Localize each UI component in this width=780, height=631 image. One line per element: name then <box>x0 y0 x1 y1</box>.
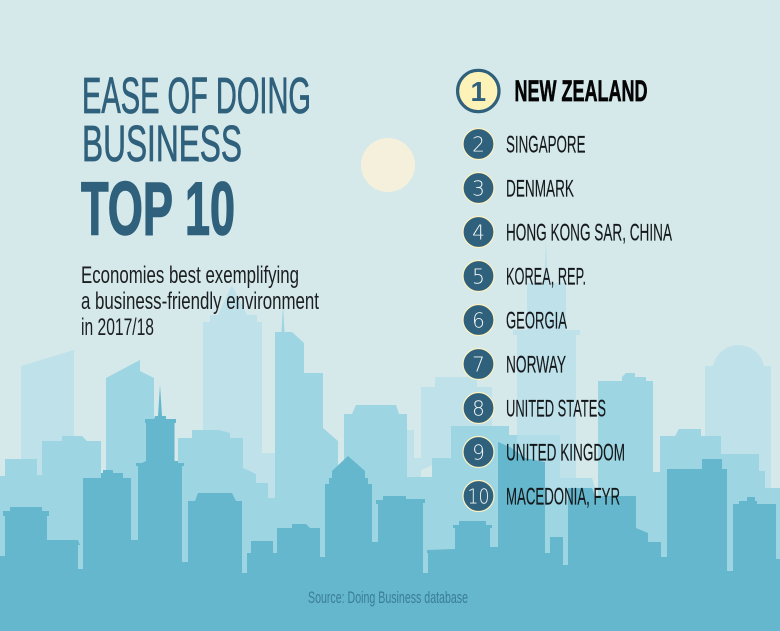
source note: Source: Doing Business database <box>308 588 468 607</box>
skyline: distant buildings <box>21 240 771 520</box>
rank 1: New Zealand: NEW ZEALAND <box>514 75 648 108</box>
skyline: middle buildings <box>0 305 780 600</box>
subtitle text: in 2017/18 <box>81 314 154 341</box>
rank 7: Norway: 7 <box>472 352 485 376</box>
rank 6: Georgia <box>463 304 567 336</box>
rank 9: United Kingdom: UNITED KINGDOM <box>506 439 625 466</box>
rank 6: Georgia: GEORGIA <box>506 307 567 334</box>
rank 5: Korea, Rep.: 5 <box>472 264 485 288</box>
rank 10: Macedonia, FYR: 10 <box>468 484 490 508</box>
rank 2: Singapore <box>463 128 586 160</box>
rank 5: Korea, Rep. <box>463 260 586 292</box>
icon: sun <box>361 138 415 192</box>
rank 7: Norway: NORWAY <box>506 351 566 378</box>
heading line: business: BUSINESS <box>82 115 242 172</box>
ranking list <box>458 70 672 512</box>
rank 8: United States <box>463 392 606 424</box>
rank 4: Hong Kong SAR, China <box>463 216 672 248</box>
rank 10: Macedonia, FYR: MACEDONIA, FYR <box>506 483 620 510</box>
rank 3: Denmark <box>463 172 574 204</box>
rank 6: Georgia: 6 <box>472 308 485 332</box>
rank 1: New Zealand: 1 <box>471 76 486 107</box>
subtitle text <box>81 262 319 341</box>
skyline: foreground buildings and ground <box>0 385 780 631</box>
rank 8: United States: UNITED STATES <box>506 395 606 422</box>
rank 3: Denmark: 3 <box>472 176 485 200</box>
rank 9: United Kingdom: 9 <box>472 440 485 464</box>
rank 5: Korea, Rep.: KOREA, REP. <box>506 263 586 290</box>
rank 10: Macedonia, FYR <box>463 480 620 512</box>
rank 3: Denmark: DENMARK <box>506 175 574 202</box>
rank 2: Singapore: 2 <box>472 132 485 156</box>
heading line: top: TOP <box>81 166 173 250</box>
subtitle text: a business-friendly environment <box>81 288 319 315</box>
rank 4: Hong Kong SAR, China: 4 <box>472 220 485 244</box>
rank 2: Singapore: SINGAPORE <box>506 131 586 158</box>
rank 7: Norway <box>463 348 566 380</box>
rank 9: United Kingdom <box>463 436 625 468</box>
rank 1: New Zealand <box>458 70 648 112</box>
heading line: 10: 10 <box>185 166 235 250</box>
skyline: tower shade band <box>517 435 598 520</box>
title <box>81 67 311 250</box>
subtitle text: Economies best exemplifying <box>81 262 299 289</box>
heading line: ease of doing: EASE OF DOING <box>82 67 311 124</box>
rank 8: United States: 8 <box>472 396 485 420</box>
